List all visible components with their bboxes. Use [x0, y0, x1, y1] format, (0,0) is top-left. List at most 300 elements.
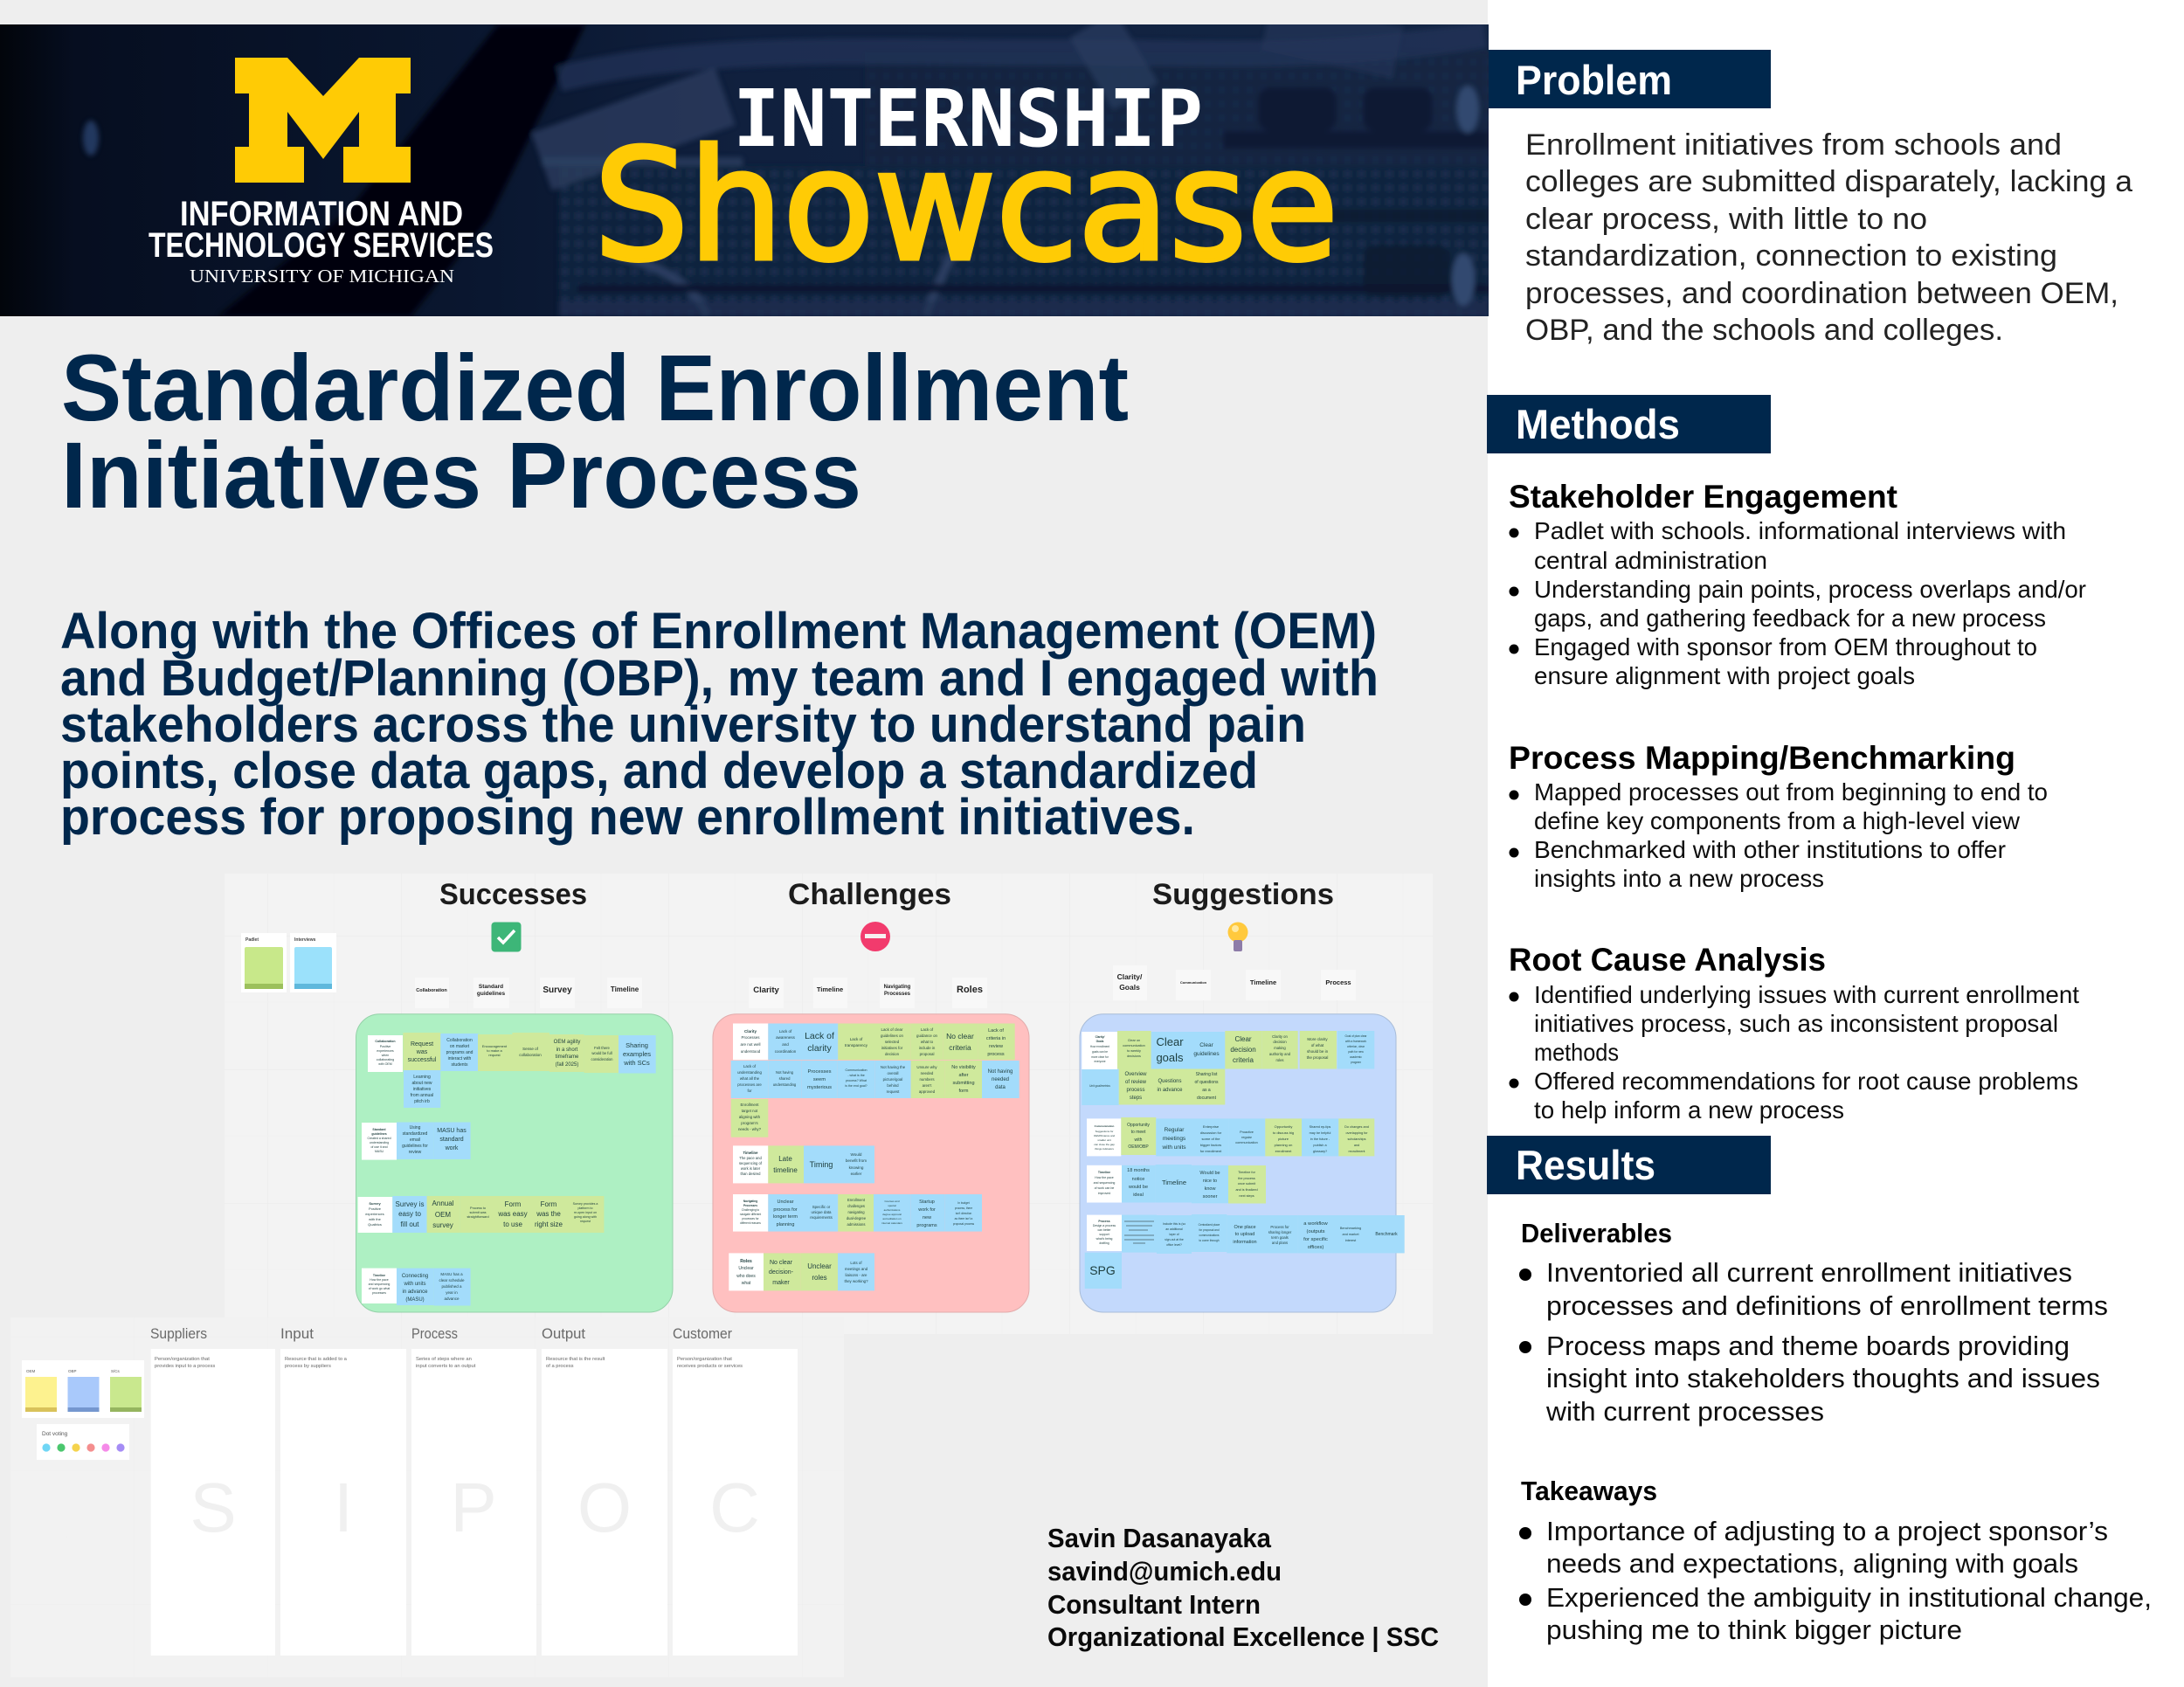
sticky notes: improved: [1098, 1192, 1110, 1195]
sticky notes: Lack of: [850, 1037, 863, 1041]
text block: root cause analysis: to help inform a new process: [1534, 1096, 1844, 1124]
sticky notes: How the pace: [370, 1278, 389, 1282]
sticky notes: Encouragement: [482, 1044, 508, 1048]
sticky notes: Clarity on: [1272, 1034, 1289, 1039]
sticky notes: offices): [1308, 1245, 1324, 1250]
sticky notes: re-open input on: [574, 1211, 597, 1214]
sticky notes: document: [1197, 1096, 1217, 1101]
sticky notes: sooner: [1203, 1194, 1218, 1200]
sticky notes: Lack of: [779, 1029, 792, 1034]
sticky notes: from annual: [411, 1093, 433, 1098]
sticky notes: seem: [813, 1077, 826, 1082]
sticky notes: Timeline: [1162, 1179, 1186, 1186]
sticky notes: Communication: [846, 1068, 867, 1072]
text block: deliverables: Inventoried all current enrollment initiatives: [1546, 1257, 2072, 1288]
sticky notes: what: [742, 1281, 751, 1286]
sticky notes: Annual: [432, 1200, 454, 1207]
sticky notes: transparency: [845, 1043, 868, 1047]
sticky notes: navigate different: [740, 1213, 761, 1216]
heading: methods: [1487, 395, 1771, 453]
sticky notes: Clear: [1199, 1042, 1214, 1048]
theme header cards: Process: [1325, 978, 1351, 986]
sticky notes: everyone: [1094, 1060, 1106, 1063]
sticky notes: Clear: [1156, 1035, 1184, 1048]
sticky notes: guidelines for: [402, 1144, 428, 1149]
sticky notes: Not having: [776, 1070, 794, 1075]
sticky notes: pitch irb: [414, 1099, 430, 1104]
sticky notes: making: [1274, 1046, 1286, 1050]
sticky notes: Form: [541, 1200, 557, 1208]
column: customer: receives products or services: [677, 1364, 743, 1369]
sticky notes: of work can be: [1095, 1186, 1114, 1190]
icon: check mark: [491, 923, 521, 952]
sticky notes: Processes: [743, 1204, 757, 1207]
sticky notes: advance: [444, 1296, 460, 1301]
sticky notes: about new: [411, 1081, 432, 1086]
text block: problem: clear process, with little to no: [1525, 203, 1927, 236]
sticky notes: drafting: [1099, 1241, 1109, 1245]
sticky notes: isn't direction: [956, 1212, 971, 1215]
right column background: [1488, 0, 2184, 1687]
sticky notes: Opportunity: [1127, 1123, 1150, 1128]
sticky notes: Would be: [1199, 1171, 1220, 1176]
legend: stakeholder colours: S/Cs: [111, 1369, 121, 1373]
sticky notes: process for: [773, 1207, 798, 1213]
sticky notes: and: [1354, 1144, 1359, 1147]
column: suppliers: Person/organization that: [155, 1357, 210, 1362]
sticky notes: Questions: [1158, 1079, 1182, 1084]
sticky notes: Specific or: [812, 1205, 831, 1209]
sticky notes: Standard: [372, 1128, 386, 1131]
text block: deliverables: [1519, 1218, 2108, 1427]
sticky notes: unique data: [812, 1210, 832, 1214]
sticky notes: aligning with: [739, 1115, 761, 1119]
sticky notes: submitting: [952, 1081, 975, 1086]
logo text: [149, 195, 494, 287]
theme header cards: Clarity/: [1117, 972, 1143, 981]
logo text: TECHNOLOGY SERVICES: [149, 226, 494, 265]
text block: process mapping: insights into a new process: [1534, 865, 1824, 892]
sticky notes: standard: [439, 1137, 464, 1143]
sticky notes: easy to: [398, 1210, 421, 1218]
sticky notes: with SCs: [623, 1059, 650, 1067]
sticky notes: knowing: [849, 1165, 864, 1170]
legend: dot voting: Dot voting: [42, 1431, 68, 1437]
sticky notes: One place: [1234, 1225, 1256, 1230]
sticky notes: Process for: [1270, 1225, 1289, 1229]
sticky notes: when: [382, 1054, 389, 1057]
sticky notes: Do changes and: [1344, 1125, 1369, 1129]
sticky notes: Suggestions for: [1095, 1130, 1113, 1133]
sticky notes: OEM agility: [554, 1040, 580, 1045]
sticky notes: on market: [450, 1044, 470, 1049]
theme header cards: [415, 978, 642, 1008]
sticky notes: In budget: [957, 1201, 970, 1205]
sticky notes: Late: [778, 1155, 792, 1163]
sticky notes: target not: [742, 1109, 758, 1113]
column: input: [280, 1325, 406, 1656]
board: theme boards: [10, 874, 1433, 1677]
text block: problem: colleges are submitted disparately, lacking a: [1525, 165, 2132, 198]
title: Initiatives Process: [61, 422, 861, 528]
theme header cards: Standard: [479, 984, 503, 990]
sticky notes: Startup: [919, 1200, 935, 1205]
panel body: [1080, 1014, 1396, 1312]
sticky notes: are not well: [740, 1042, 761, 1047]
theme header cards: Goals: [1119, 983, 1140, 992]
column: output: O: [577, 1469, 632, 1546]
text block: problem: processes, and coordination between OEM,: [1525, 277, 2118, 310]
legend: padlet and interviews: [241, 933, 336, 992]
text block: root cause analysis: [1509, 942, 2079, 1124]
sticky notes: Benchmarking: [1340, 1227, 1361, 1230]
sticky notes: numbers: [919, 1077, 935, 1082]
sticky notes: requirements: [810, 1215, 833, 1220]
sticky notes: criterion, clear: [1347, 1045, 1365, 1048]
sticky notes: was: [416, 1049, 428, 1055]
sticky notes: authorizations: [884, 1208, 901, 1212]
sticky notes: steps: [1130, 1096, 1142, 1101]
sticky notes: programs and: [446, 1050, 473, 1055]
banner title: Showcase: Showcase: [594, 118, 1338, 295]
sticky notes: clarity: [807, 1043, 832, 1054]
sticky notes: Felt there: [594, 1046, 611, 1050]
column: process: Process: [411, 1325, 458, 1342]
sticky notes: selected: [885, 1040, 900, 1044]
sticky notes: and sequencing: [1094, 1181, 1115, 1185]
sticky notes: criteria in: [986, 1036, 1006, 1041]
text block: takeaways: Experienced the ambiguity in institutional change,: [1546, 1582, 2152, 1613]
sticky notes: understood: [741, 1049, 761, 1054]
sticky notes: needed: [921, 1071, 934, 1075]
sticky notes: than desired: [740, 1172, 761, 1176]
heading: methods: Methods: [1516, 401, 1680, 447]
heading: results: Results: [1516, 1142, 1655, 1188]
sticky notes: sharing longer: [1268, 1230, 1292, 1234]
text block: stakeholder engagement: ensure alignment with project goals: [1534, 662, 1915, 689]
sticky notes: Sense of: [522, 1047, 539, 1051]
theme header cards: [749, 978, 987, 1008]
sticky notes: decisions: [1127, 1054, 1141, 1058]
theme header cards: Timeline: [611, 985, 639, 993]
text block: root cause analysis: methods: [1534, 1039, 1619, 1066]
sticky notes: Learning: [413, 1075, 431, 1080]
title: Standardized Enrollment: [61, 335, 1129, 440]
sticky notes: Processes: [741, 1035, 760, 1040]
text block: problem: OBP, and the schools and colleges.: [1525, 314, 2003, 347]
sticky notes: collaborating: [377, 1058, 394, 1061]
sticky notes: OEM: [435, 1211, 451, 1219]
sticky notes: to use: [503, 1220, 522, 1228]
sticky notes: for: [747, 1089, 752, 1093]
sticky notes: Navigating: [743, 1200, 757, 1203]
sticky notes: Regular: [1165, 1127, 1185, 1133]
logo text: UNIVERSITY OF MICHIGAN: [190, 266, 454, 287]
sticky notes: with the: [369, 1217, 382, 1221]
sticky notes: office level?: [1166, 1243, 1182, 1247]
sticky notes: in advance: [402, 1289, 428, 1295]
sticky notes: Positive: [380, 1045, 390, 1048]
sticky notes: was easy: [497, 1210, 528, 1218]
theme header cards: guidelines: [477, 991, 505, 997]
sticky notes: Courses and: [884, 1200, 900, 1203]
sticky notes: experiences: [377, 1049, 394, 1053]
sticky notes: would be: [1128, 1185, 1148, 1190]
banner title: Internship: INTERNSHIP: [733, 73, 1203, 165]
sticky notes: smaller unit: [1097, 1138, 1111, 1142]
column: suppliers: Suppliers: [150, 1325, 207, 1342]
column: input: Resource that is added to a: [285, 1357, 348, 1362]
text block: root cause analysis: Root Cause Analysis: [1509, 942, 1826, 978]
heading: successes: Successes: [439, 878, 587, 911]
sticky notes: No clear: [946, 1032, 974, 1041]
sticky notes: bigger factors: [1200, 1143, 1221, 1147]
sticky notes: Shared ep-tips: [1310, 1125, 1330, 1129]
text block: stakeholder engagement: Understanding pain points, process overlaps and/or: [1534, 576, 2086, 603]
sticky notes: once submit: [1238, 1182, 1256, 1186]
sticky notes: liaisons - are: [846, 1273, 867, 1277]
text block: process mapping: Benchmarked with other institutions to offer: [1534, 836, 2006, 863]
sticky notes: notice: [1132, 1177, 1144, 1182]
sticky notes: examples: [623, 1050, 651, 1058]
sticky notes: what all the: [740, 1076, 760, 1081]
legend: padlet and interviews: Padlet: [245, 937, 259, 943]
sticky notes: interest: [1345, 1239, 1357, 1242]
sticky notes: Survey: [369, 1201, 381, 1206]
sticky notes: information: [1233, 1240, 1257, 1245]
heading: suggestions: Suggestions: [1152, 878, 1334, 911]
sticky notes: with OEM: [378, 1062, 392, 1066]
text block: deliverables: with current processes: [1545, 1396, 1824, 1427]
sticky notes: awareness: [776, 1035, 796, 1040]
heading: challenges: Challenges: [788, 878, 951, 911]
sticky notes: more clear for: [1091, 1055, 1109, 1059]
sticky notes: scholarships: [1347, 1137, 1366, 1141]
sticky notes: OEM/Finance and: [1094, 1134, 1115, 1137]
sticky notes: meetings: [1163, 1136, 1186, 1142]
sticky notes: Enrollment: [847, 1198, 866, 1202]
sticky notes: aren't: [923, 1083, 932, 1088]
sticky notes: they working?: [844, 1279, 868, 1283]
sticky notes: may be helpful: [1310, 1131, 1330, 1135]
column: output: of a process: [546, 1364, 574, 1369]
sticky notes: work: [445, 1145, 459, 1151]
sticky notes: nice to: [1203, 1179, 1217, 1184]
sticky notes: an additional: [1165, 1227, 1183, 1231]
sticky notes: Unclear: [778, 1200, 794, 1205]
text block: stakeholder engagement: central administration: [1534, 547, 1767, 574]
sticky notes: Unclear: [807, 1262, 832, 1270]
sticky notes: regular: [1241, 1136, 1253, 1139]
sticky notes: Survey provides a: [573, 1202, 598, 1206]
sticky notes: Challenging to: [742, 1208, 759, 1212]
column: output: Resource that is the result: [546, 1357, 605, 1362]
sticky notes: navigating: [847, 1210, 865, 1214]
sticky notes: MASU has a: [440, 1272, 463, 1276]
sticky notes: academic: [1350, 1055, 1362, 1059]
sticky notes: processes: [372, 1291, 386, 1295]
sticky notes: decision: [885, 1052, 900, 1056]
sticky notes: planning on: [1275, 1143, 1292, 1147]
text block: stakeholder engagement: Engaged with sponsor from OEM throughout to: [1534, 633, 2037, 660]
sticky notes: submit was: [470, 1211, 487, 1214]
sticky notes: collaboration: [519, 1053, 542, 1057]
sticky notes: Would: [851, 1152, 862, 1157]
sticky notes: layer of: [1169, 1233, 1179, 1236]
sticky notes: shared: [779, 1076, 791, 1081]
sticky notes: platform to: [578, 1206, 592, 1210]
sticky notes: goals can be: [1092, 1050, 1108, 1054]
sticky notes: (outputs: [1307, 1229, 1325, 1234]
sticky notes: in advance: [1157, 1088, 1183, 1093]
sticky notes: Connecting: [402, 1274, 428, 1279]
sticky notes: glossary?: [1313, 1150, 1327, 1153]
banner: [0, 24, 1489, 316]
sticky notes: sequencing of: [739, 1161, 763, 1165]
sticky notes: Centralized place: [1199, 1223, 1220, 1227]
author details: savind@umich.edu: [1047, 1556, 1282, 1587]
sticky notes: authority and: [1269, 1052, 1291, 1056]
sticky notes: is the end goal?: [845, 1084, 867, 1088]
sticky notes: Communication: [1095, 1124, 1114, 1128]
sticky notes: work is later: [741, 1166, 761, 1171]
sticky notes: admissions: [847, 1222, 865, 1227]
theme header cards: Clarity: [753, 985, 779, 995]
sticky notes: decision: [1273, 1040, 1287, 1044]
column: customer: Customer: [673, 1325, 732, 1342]
sticky notes: The pace and: [739, 1156, 762, 1160]
theme header cards: Processes: [884, 992, 911, 997]
text block: deliverables: Deliverables: [1521, 1218, 1672, 1248]
sticky notes: clear schedule: [439, 1278, 465, 1283]
sticky notes: (MASU): [405, 1297, 425, 1303]
sticky notes: Clarity: [744, 1029, 757, 1034]
text block: process mapping: [1509, 740, 2048, 892]
sticky notes: Lack of clear: [881, 1027, 903, 1032]
sticky notes: to weekly: [1127, 1049, 1141, 1053]
sticky notes: Collaboration: [375, 1040, 396, 1043]
sticky notes: MASU has: [437, 1128, 467, 1134]
sticky notes: understanding: [773, 1082, 797, 1087]
sticky notes: Lack of: [921, 1027, 934, 1032]
sticky notes: Using: [410, 1125, 421, 1130]
sticky notes: challenges: [847, 1204, 865, 1208]
sticky notes: longer term: [773, 1214, 798, 1220]
sticky notes: maker: [772, 1280, 790, 1286]
sticky notes: year in: [446, 1290, 458, 1295]
sticky notes: communication: [1123, 1044, 1145, 1047]
sticky notes: needs - why?: [738, 1127, 762, 1131]
column: input: process by suppliers: [285, 1364, 331, 1369]
sticky notes: Request: [411, 1041, 433, 1047]
sticky notes: successful: [408, 1057, 437, 1063]
sticky notes: Include this is (so: [1163, 1222, 1185, 1226]
theme header cards: Communication: [1180, 980, 1207, 985]
sticky notes: what to: [921, 1040, 934, 1044]
text block: stakeholder engagement: Padlet with schools. informational interviews with: [1534, 517, 2066, 544]
sticky notes: Sharing list: [1196, 1072, 1218, 1077]
text block: takeaways: Importance of adjusting to a project sponsor’s: [1546, 1516, 2108, 1546]
sticky notes: coordination: [775, 1049, 797, 1054]
sticky notes: what’s being: [1096, 1237, 1113, 1241]
summary statement: and Budget/Planning (OBP), my team and I engaged with: [60, 650, 1379, 707]
theme header cards: Survey: [543, 985, 572, 995]
panel: successes: [356, 878, 673, 1312]
sticky notes: meetings and: [845, 1267, 868, 1271]
sticky notes: to come through: [1199, 1239, 1220, 1242]
sticky notes: guidelines: [371, 1132, 387, 1136]
sticky notes: Lack of: [805, 1031, 834, 1041]
sticky notes: programs: [916, 1223, 937, 1228]
sticky notes: Qualtrics: [368, 1222, 382, 1227]
summary statement: points, close data gaps, and develop a standardized: [60, 743, 1258, 799]
sticky notes: Timeline: [743, 1151, 758, 1155]
author details: Savin Dasanayaka: [1047, 1523, 1272, 1553]
column: input: I: [334, 1469, 353, 1546]
sticky notes: data: [995, 1085, 1006, 1090]
sticky notes: can close the gap: [1094, 1143, 1115, 1146]
sticky notes: in the future -: [1310, 1137, 1330, 1141]
sticky notes: of work go what: [369, 1287, 390, 1290]
sticky notes: Form: [505, 1200, 522, 1208]
sticky notes: Unclear: [738, 1266, 754, 1271]
sticky notes: work for: [917, 1207, 936, 1213]
sticky notes: different reasons: [740, 1221, 761, 1225]
summary statement: process for proposing new enrollment initiatives.: [60, 789, 1195, 846]
sticky notes: published a: [441, 1284, 462, 1289]
summary statement: [60, 603, 1379, 846]
sticky notes: accreditation on: [882, 1217, 902, 1220]
sticky notes: Enterprise: [1203, 1124, 1220, 1129]
sticky notes: goals: [1156, 1051, 1184, 1064]
sticky notes: after: [958, 1073, 969, 1078]
sticky notes: of questions: [1195, 1080, 1219, 1085]
text block: root cause analysis: Identified underlying issues with current enrollment: [1534, 981, 2079, 1008]
text block: stakeholder engagement: gaps, and gathering feedback for a new process: [1534, 605, 2046, 632]
legend: stakeholder colours: OEM: [26, 1369, 36, 1373]
sticky notes: mysterious: [807, 1085, 832, 1090]
sticky notes: Timeline: [1098, 1171, 1110, 1174]
sticky notes: Processes: [807, 1069, 832, 1075]
summary statement: stakeholders across the university to understand pain: [60, 696, 1306, 753]
sticky notes: approved: [919, 1089, 936, 1094]
theme header cards: Navigating: [884, 985, 911, 990]
sticky notes: Clarity/: [1095, 1035, 1105, 1039]
summary statement: Along with the Offices of Enrollment Management (OEM): [60, 603, 1377, 660]
sticky notes: decision-: [769, 1269, 794, 1276]
text block: takeaways: Takeaways: [1521, 1476, 1657, 1506]
sticky notes: initiatives: [413, 1087, 432, 1092]
sticky notes: 18 months: [1127, 1168, 1150, 1173]
sticky notes: processes are: [737, 1082, 762, 1087]
sticky notes: know: [1205, 1186, 1215, 1192]
sticky notes: was the: [536, 1210, 561, 1218]
sticky notes: should be in: [1307, 1049, 1329, 1054]
sticky notes: criteria: [1233, 1056, 1254, 1064]
icon: light bulb: [1228, 923, 1248, 951]
text block: problem: Enrollment initiatives from schools and: [1525, 128, 2062, 162]
sticky notes: of review: [1125, 1080, 1147, 1085]
sticky notes: recruitment: [1349, 1150, 1365, 1153]
text block: deliverables: insight into stakeholders thoughts and issues: [1546, 1363, 2100, 1393]
text block: takeaways: needs and expectations, aligning with goals: [1546, 1548, 2078, 1579]
author details: [1047, 1523, 1439, 1652]
sticky notes: program: [1351, 1061, 1361, 1064]
sticky notes: with units: [1161, 1144, 1186, 1151]
sticky notes: for enrollment: [1200, 1149, 1222, 1153]
sticky notes: and: [782, 1042, 789, 1047]
column: process: [411, 1325, 536, 1656]
